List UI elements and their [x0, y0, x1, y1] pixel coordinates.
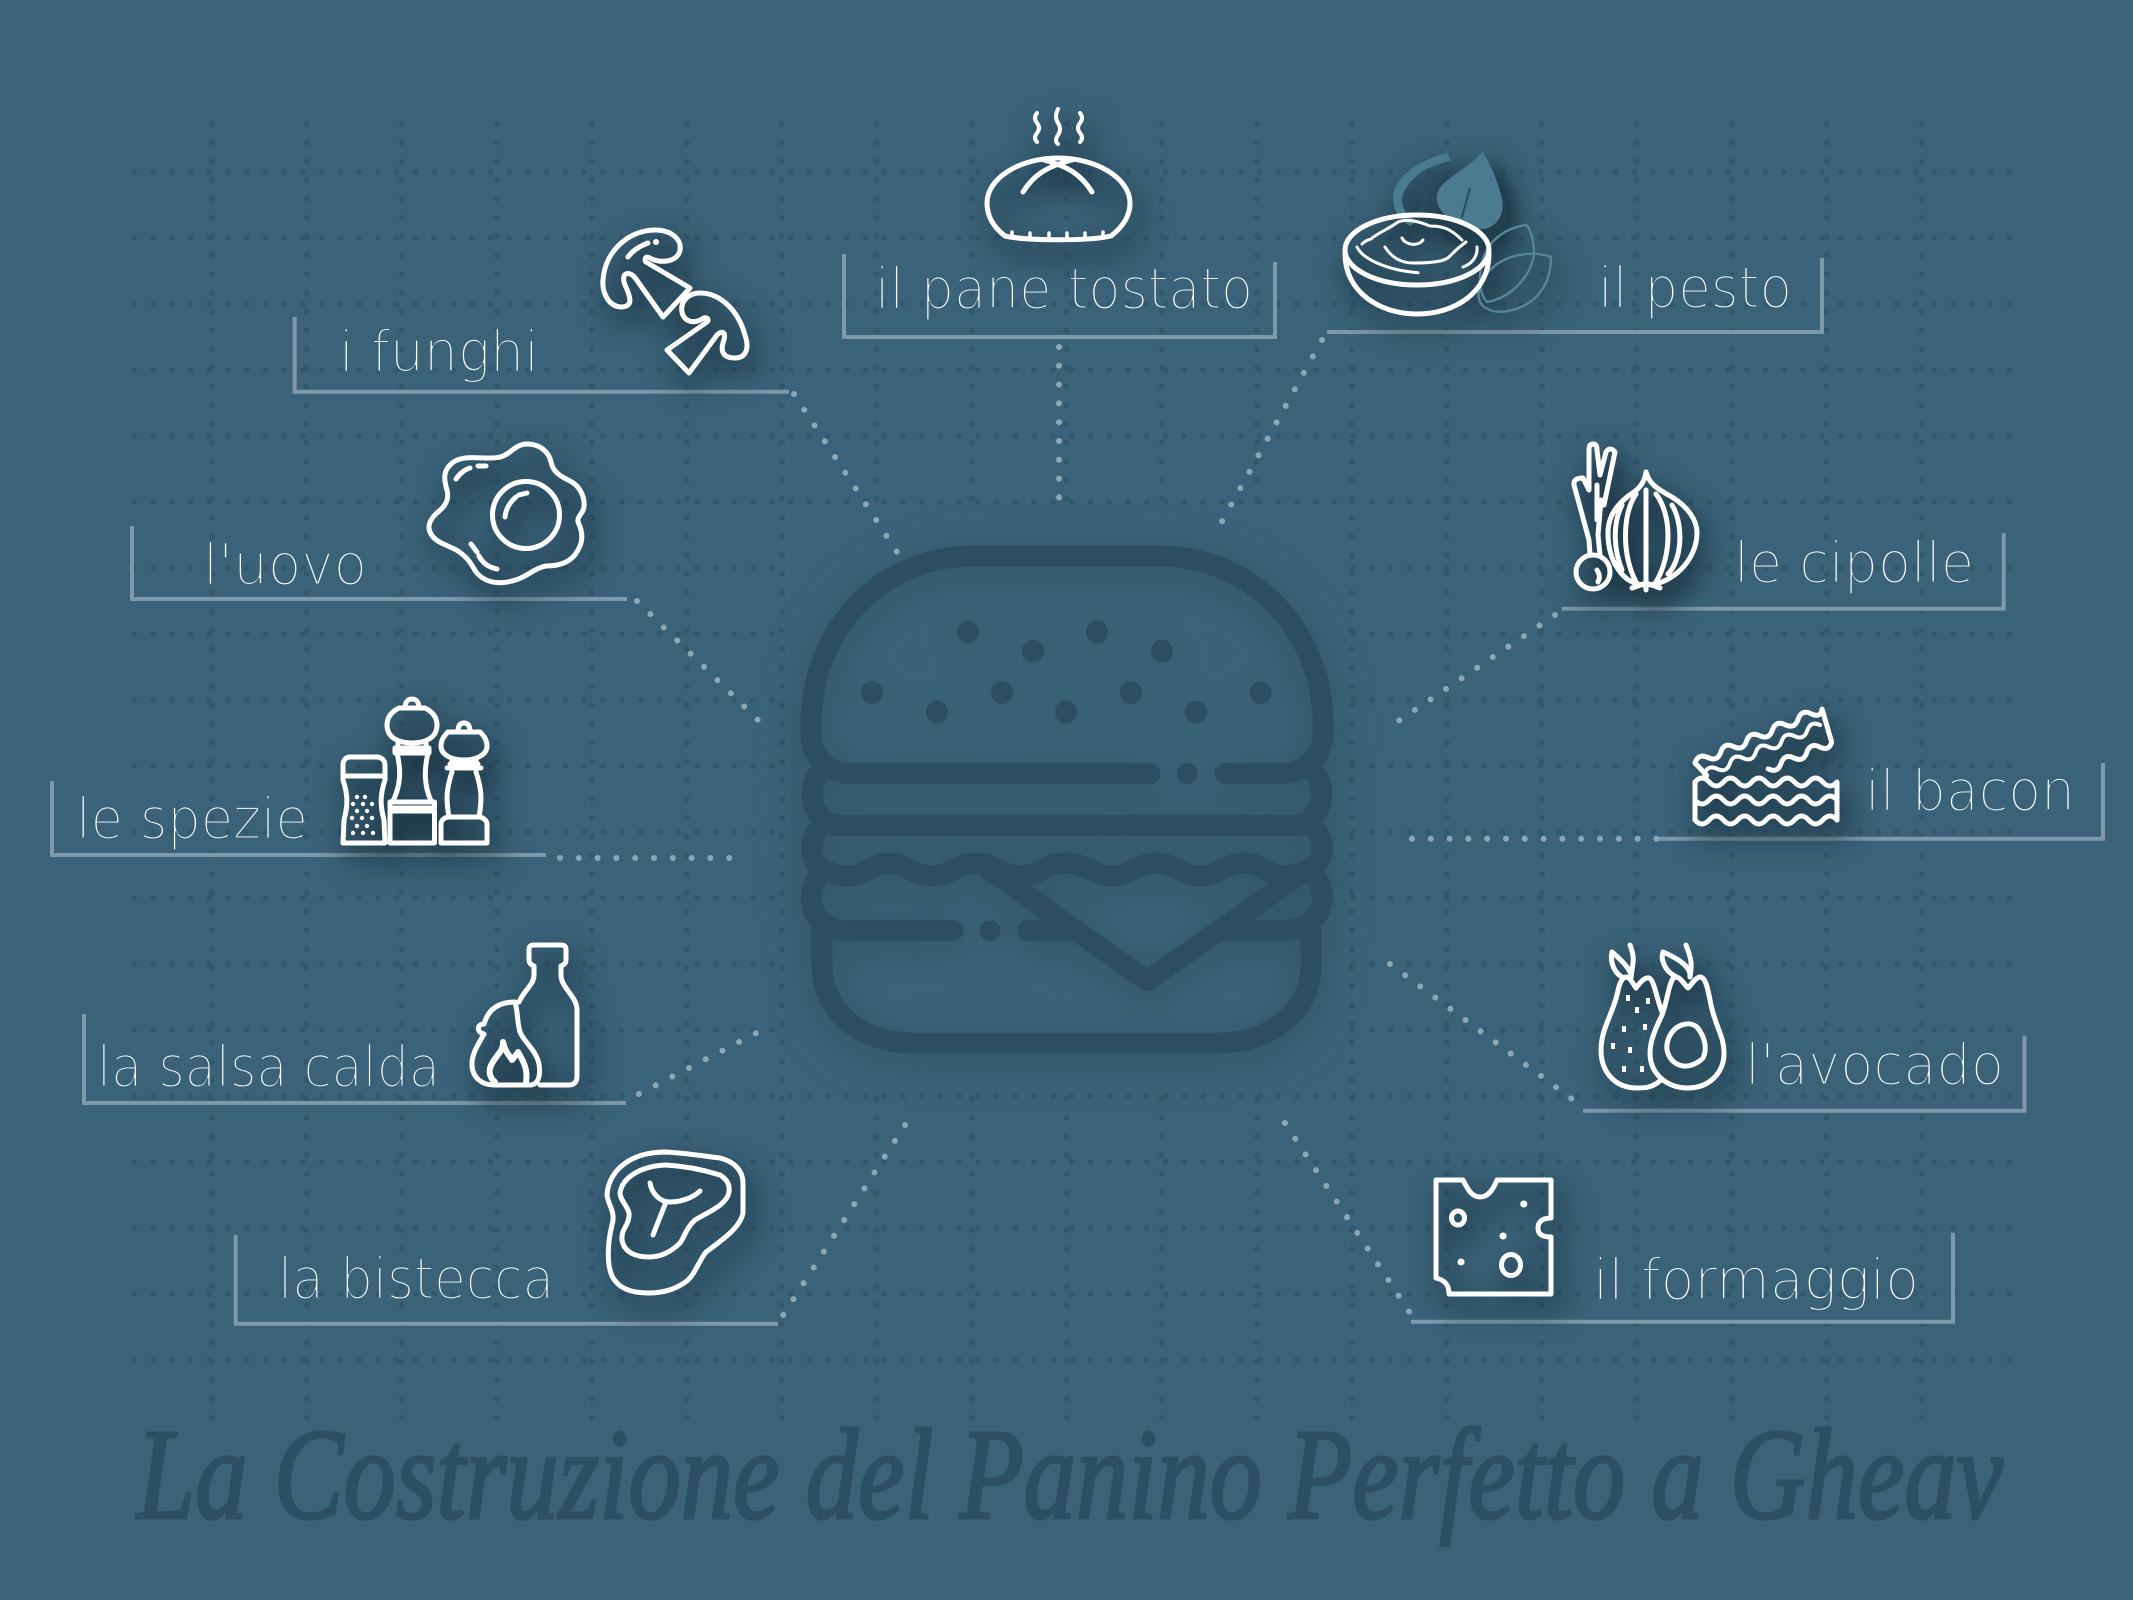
- panel: l'uovo: [132, 444, 627, 599]
- panel: il pesto: il pesto: [1598, 256, 1792, 321]
- icon: bread: [987, 109, 1130, 240]
- panel: le cipolle: [1562, 444, 2004, 609]
- leaf outline behind bowl: [1393, 153, 1451, 226]
- almonds: [1479, 225, 1551, 312]
- panel: il bacon: [1659, 705, 2103, 839]
- icon: pesto bowl with leaves: [1345, 152, 1551, 314]
- panel: le cipolle: le cipolle: [1734, 531, 1974, 596]
- bowl: [1345, 215, 1489, 314]
- solid leaf: [1437, 152, 1503, 229]
- icon: hot sauce bottle: [472, 945, 577, 1085]
- icon: fried egg: [429, 444, 584, 583]
- panel: i funghi: i funghi: [339, 320, 539, 385]
- icon: onions: [1574, 444, 1697, 590]
- panel: il pane tostato: [844, 109, 1275, 337]
- dotted connectors: [560, 340, 1660, 1317]
- panel: il formaggio: [1411, 1180, 1953, 1322]
- panel: i funghi: [295, 230, 789, 392]
- panel: il bacon: il bacon: [1865, 759, 2075, 824]
- icon: mushrooms: [603, 230, 747, 373]
- panel: l'avocado: l'avocado: [1745, 1033, 2004, 1098]
- icon: steak: [607, 1152, 743, 1293]
- icon: avocados: [1601, 945, 1724, 1088]
- panel: la salsa calda: la salsa calda: [97, 1035, 440, 1100]
- panel: il formaggio: il formaggio: [1593, 1248, 1919, 1313]
- panel: l'uovo: l'uovo: [203, 533, 367, 598]
- icon: bacon: [1693, 705, 1837, 824]
- panel: il pane tostato: il pane tostato: [875, 257, 1253, 322]
- icon: cheese: [1436, 1180, 1551, 1294]
- panel: il pesto: [1327, 152, 1822, 332]
- panel: la salsa calda: [84, 945, 626, 1103]
- dotted background grid: [134, 124, 2012, 1419]
- panel: la bistecca: la bistecca: [278, 1247, 554, 1312]
- panel: le spezie: le spezie: [76, 787, 308, 852]
- central burger icon: [811, 556, 1323, 1043]
- icon: spice shakers: [343, 699, 487, 843]
- panel: l'avocado: [1583, 945, 2024, 1111]
- panel: le spezie: [52, 699, 546, 855]
- panel: la bistecca: [236, 1152, 778, 1324]
- leaf veins: [1420, 188, 1470, 218]
